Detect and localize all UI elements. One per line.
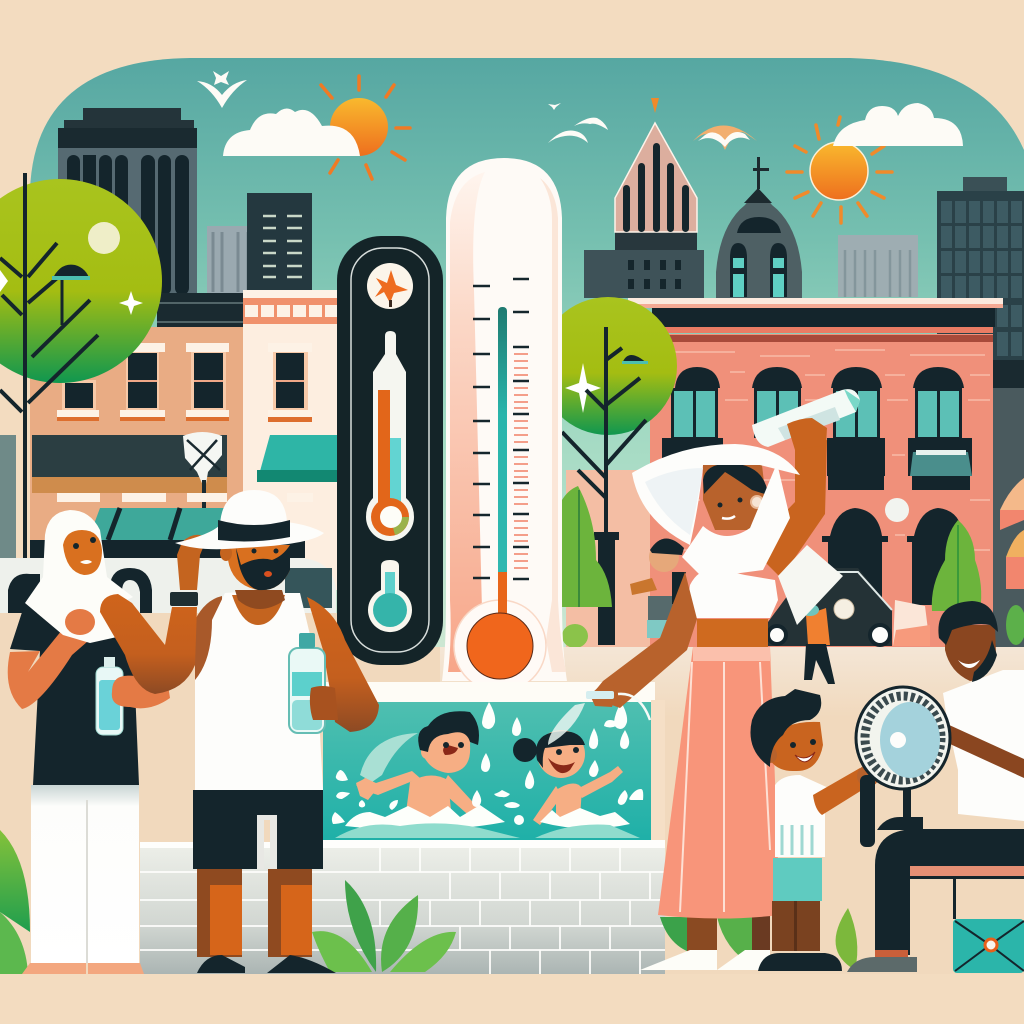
child left [356, 711, 482, 820]
person: seated man [847, 601, 1024, 973]
child right [513, 730, 623, 825]
person: man in hat [100, 490, 379, 973]
pool wall and water [323, 682, 665, 848]
water bottle raised [752, 389, 860, 447]
ground [0, 613, 1024, 974]
spray from bottle [548, 703, 585, 745]
icon: sun left [321, 76, 410, 179]
building: right brick [566, 298, 1024, 650]
teal bulb [368, 560, 412, 632]
fan [758, 687, 950, 971]
icon: sun right [787, 117, 892, 223]
shrubs mid [562, 486, 1024, 648]
tree: left [0, 173, 162, 610]
vehicles behind left people [0, 435, 336, 613]
foam [345, 805, 505, 830]
car right [768, 568, 930, 646]
water bottle [96, 657, 123, 735]
small thermometer [366, 331, 414, 541]
clouds [223, 103, 963, 156]
sky panel [30, 58, 1024, 660]
plants front [0, 830, 857, 974]
background person far [630, 538, 854, 684]
icon: small sun dial [367, 263, 413, 309]
gauge panel: dark thermometer [337, 236, 443, 665]
tree: centre [539, 297, 677, 645]
building: left shops [30, 290, 337, 597]
skyline buildings [58, 98, 1024, 366]
large thermometer [442, 158, 567, 692]
water splashes [332, 702, 643, 825]
icon: birds [197, 71, 757, 150]
brick wall [140, 842, 665, 974]
small background figure [801, 599, 854, 684]
person: woman in headscarf [8, 510, 170, 974]
person: child with fan [750, 689, 879, 951]
bottom band [0, 974, 1024, 1024]
person: woman with wide hat [586, 389, 860, 970]
water bottle [289, 633, 325, 733]
